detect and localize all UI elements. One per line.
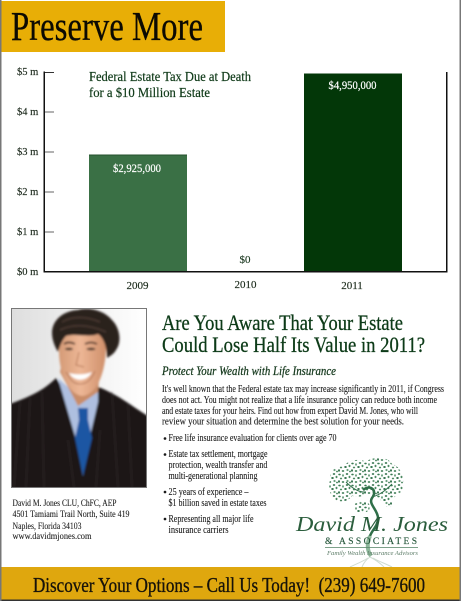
contact details: David M. Jones CLU, ChFC, AEP bbox=[12, 499, 116, 509]
y-axis labels bbox=[17, 67, 38, 278]
contact details: Naples, Florida 34103 bbox=[12, 522, 82, 532]
logo tagline: Family Wealth Insurance Advisors bbox=[326, 550, 418, 557]
call to action bar bbox=[2, 567, 460, 601]
contact details: 4501 Tamiami Trail North, Suite 419 bbox=[12, 510, 130, 520]
subheading: Protect Your Wealth with Life Insurance bbox=[161, 364, 336, 378]
tie bbox=[75, 408, 92, 476]
bar: 2011: $4,950,000 bbox=[328, 78, 376, 92]
x-axis labels: 2009 bbox=[126, 280, 149, 292]
bullet list: $1 billion saved in estate taxes bbox=[168, 498, 267, 509]
bullet list: multi-generational planning bbox=[168, 471, 258, 482]
logo subtitle: & ASSOCIATES bbox=[325, 537, 417, 547]
shirt bbox=[58, 378, 98, 476]
bar chart: federal estate tax bbox=[17, 67, 448, 292]
contact details bbox=[12, 499, 130, 542]
bar: 2011 bbox=[304, 74, 402, 272]
logo name: David M. Jones bbox=[295, 512, 448, 536]
y-axis labels: $3 m bbox=[17, 147, 38, 158]
bullet list: 25 years of experience – bbox=[168, 487, 249, 498]
x-axis labels: 2011 bbox=[341, 280, 363, 292]
y-axis labels: $5 m bbox=[17, 67, 38, 78]
bar: 2009: $2,925,000 bbox=[113, 161, 161, 175]
body paragraph: review your situation and determine the best solution for your needs. bbox=[162, 416, 404, 428]
suit bbox=[10, 378, 148, 489]
bullet list: insurance carriers bbox=[168, 525, 229, 536]
chart title bbox=[89, 70, 251, 101]
main headline: Are You Aware That Your Estate bbox=[162, 310, 403, 335]
y-axis labels: $0 m bbox=[17, 267, 38, 278]
x-axis labels bbox=[126, 279, 363, 292]
title banner: Preserve More bbox=[11, 3, 203, 49]
neck bbox=[60, 362, 100, 406]
x-axis labels: 2010 bbox=[234, 279, 257, 291]
bullet list bbox=[164, 433, 336, 536]
bullet list: Representing all major life bbox=[168, 514, 254, 525]
y-axis labels: $4 m bbox=[17, 107, 38, 118]
main headline bbox=[162, 310, 425, 357]
chart title: Federal Estate Tax Due at Death bbox=[89, 70, 251, 85]
bullet list: Free life insurance evaluation for clients over age 70 bbox=[168, 433, 336, 444]
face bbox=[59, 328, 106, 396]
bar label: 2010: $0 bbox=[240, 254, 251, 266]
body paragraph bbox=[162, 384, 444, 428]
hair bbox=[52, 309, 119, 358]
contact details: www.davidmjones.com bbox=[12, 532, 92, 542]
portrait photo bbox=[10, 308, 148, 489]
icon: tree bbox=[329, 458, 403, 567]
company logo bbox=[295, 458, 448, 567]
y-axis labels: $2 m bbox=[17, 187, 38, 198]
y-axis labels: $1 m bbox=[17, 227, 38, 238]
bullet list: protection, wealth transfer and bbox=[168, 460, 268, 471]
chart title: for a $10 Million Estate bbox=[89, 86, 210, 101]
bar: 2009 bbox=[89, 154, 187, 272]
bullet list: Estate tax settlement, mortgage bbox=[168, 449, 268, 460]
